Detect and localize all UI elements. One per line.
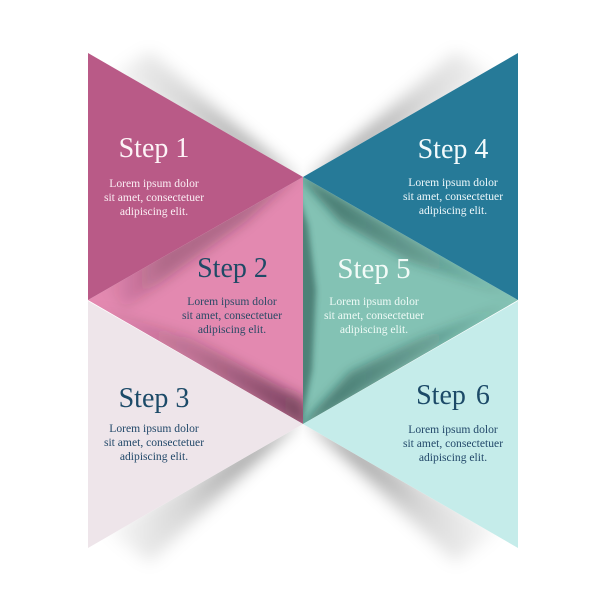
text: step 4: adipiscing elit. <box>419 204 487 217</box>
text: step 6: sit amet, consectetuer <box>403 437 503 450</box>
text: step 5: adipiscing elit. <box>340 323 408 336</box>
panel: step 4 <box>303 53 518 300</box>
panel: step 3 <box>88 301 303 548</box>
heading: step 5: Step 5 <box>337 253 411 285</box>
text: step 3: sit amet, consectetuer <box>104 436 204 449</box>
text: step 1: adipiscing elit. <box>120 205 188 218</box>
text: step 2: sit amet, consectetuer <box>182 309 282 322</box>
text: step 1: Lorem ipsum dolor <box>109 177 199 190</box>
text: step 5: Lorem ipsum dolor <box>329 295 419 308</box>
panel: step 6 <box>303 301 518 548</box>
heading: step 4: Step 4 <box>418 134 488 165</box>
text: step 6: Lorem ipsum dolor <box>408 423 498 436</box>
heading: step 1: Step 1 <box>119 133 189 164</box>
panel: step 1 <box>88 53 303 300</box>
text: step 2: Lorem ipsum dolor <box>187 295 277 308</box>
panel: step 5 <box>303 177 518 424</box>
text: step 4: sit amet, consectetuer <box>403 190 503 203</box>
heading: step 2: Step 2 <box>197 253 268 284</box>
text: step 2: adipiscing elit. <box>198 323 266 336</box>
panel: step 2 <box>88 170 310 432</box>
outer shadow: top left <box>123 53 300 175</box>
outer shadow: bottom left <box>119 426 302 560</box>
heading: step 3: Step 3 <box>119 383 189 414</box>
outer shadow: bottom right <box>304 426 487 560</box>
outer shadow: top right <box>306 53 483 175</box>
text: step 5: sit amet, consectetuer <box>324 309 424 322</box>
heading: step 6: Step 6 <box>416 380 490 411</box>
text: step 1: sit amet, consectetuer <box>104 191 204 204</box>
text: step 3: adipiscing elit. <box>120 450 188 463</box>
text: step 6: adipiscing elit. <box>419 451 487 464</box>
text: step 4: Lorem ipsum dolor <box>408 176 498 189</box>
text: step 3: Lorem ipsum dolor <box>109 422 199 435</box>
